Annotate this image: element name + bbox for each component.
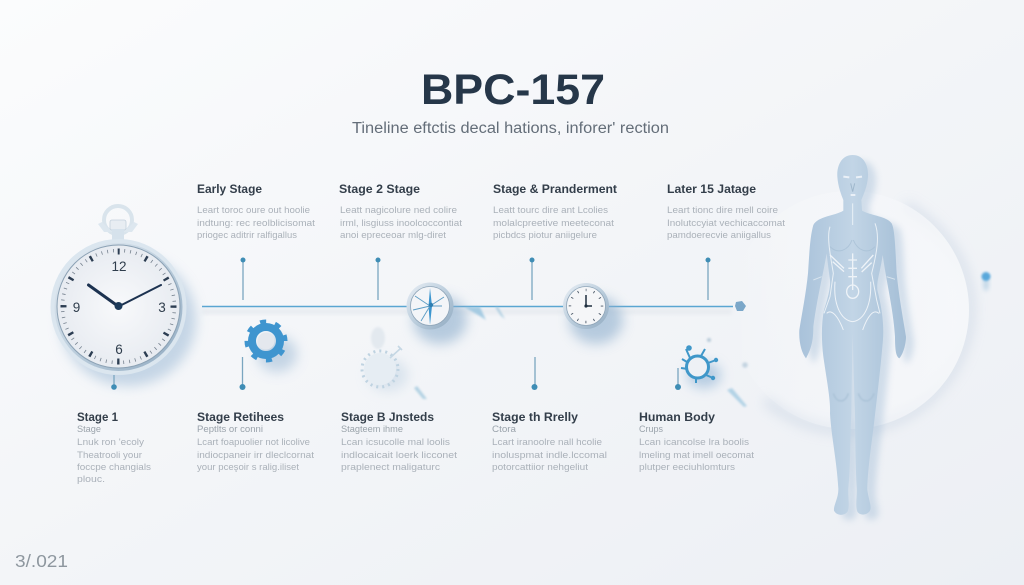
panel: human body: plutper eeciuhlomturs	[639, 462, 735, 473]
panel: stage 1: Stage 1	[77, 412, 119, 424]
timeline axis	[202, 301, 746, 314]
footer code: 3/.021	[15, 551, 68, 571]
connector: stage 2	[376, 258, 380, 300]
panel: early stage: Leart toroc oure out hoolie	[197, 205, 310, 216]
panel: stage th rrelly	[492, 412, 607, 473]
panel: stage b jnsteds: Stagteem ihme	[341, 424, 403, 435]
panel: early stage: indtung: rec reolblicisomat	[197, 218, 315, 229]
panel: stage th rrelly: Ctora	[492, 424, 517, 435]
icon: blue virus	[681, 338, 748, 388]
panel: stage 2: Stage 2 Stage	[339, 184, 420, 196]
panel: stage 1: foccpe changials	[77, 462, 151, 473]
panel: early stage: priogec aditrir ralfigallus	[197, 230, 297, 241]
panel: stage 1: Stage	[77, 424, 101, 435]
panel: stage 1: Lnuk ron 'ecoly	[77, 437, 144, 448]
panel: stage and pranderment	[493, 184, 617, 241]
panel: later stage: Inolutccyiat vechicaccomat	[667, 218, 785, 229]
panel: stage and pranderment: picbdcs piotur aniigelure	[493, 230, 597, 241]
title: BPC-157	[421, 66, 605, 114]
human body figure	[799, 155, 914, 520]
connector: stage and prandement	[530, 258, 534, 300]
wall clock	[563, 283, 623, 344]
panel: stage retihees	[197, 412, 314, 473]
panel: stage and pranderment: molalcpreetive meeteconat	[493, 218, 614, 229]
connector: early stage	[240, 258, 246, 300]
panel: stage and pranderment: Stage & Pranderment	[493, 184, 617, 196]
icon: pale virus	[362, 327, 408, 391]
panel: stage retihees: Lcart foapuolier not licolive	[197, 437, 310, 448]
panel: stage 2: irml, lisgiuss inoolcoccontiat	[340, 218, 462, 229]
large stopwatch clock: 3	[158, 300, 166, 315]
panel: human body: lmeling mat imell oecomat	[639, 450, 754, 461]
icon: blue marker dot	[982, 272, 990, 291]
panel: human body	[639, 412, 754, 473]
panel: stage b jnsteds: praplenect maligaturc	[341, 462, 440, 473]
panel: later stage: Later 15 Jatage	[667, 184, 756, 196]
decorative blue streaks on timeline	[414, 307, 747, 407]
panel: stage 1: plouc.	[77, 474, 105, 485]
panel: later stage	[667, 184, 785, 241]
panel: human body: Lcan icancolse lra boolis	[639, 437, 749, 448]
panel: stage 2: anoi epreceoar mlg-diret	[340, 230, 446, 241]
panel: stage b jnsteds: Stage B Jnsteds	[341, 412, 434, 424]
compass clock	[406, 282, 467, 344]
panel: early stage	[197, 184, 315, 241]
panel: human body: Human Body	[639, 412, 716, 424]
connector: stage retihees	[240, 357, 246, 390]
large stopwatch clock: 9	[73, 300, 80, 315]
panel: human body: Crups	[639, 424, 663, 435]
subtitle: Tineline eftctis decal hations, inforer' rection	[352, 120, 669, 137]
connector: stage th rrelly	[532, 357, 538, 390]
panel: stage 1	[77, 412, 151, 485]
panel: stage retihees: indiocpaneir irr dleclcornat	[197, 450, 314, 461]
panel: stage b jnsteds	[341, 412, 457, 473]
panel: stage retihees: your pceşoir s ralig.iliset	[197, 462, 299, 473]
panel: stage 2	[339, 184, 462, 241]
connector: later stage	[706, 258, 710, 300]
connector: human body	[675, 368, 681, 390]
panel: later stage: pamdoerecvie aniigallus	[667, 230, 771, 241]
panel: stage 2: Leatt nagicolure ned colire	[340, 205, 457, 216]
panel: stage th rrelly: inoluspmat indle.lccomal	[492, 450, 607, 461]
panel: stage th rrelly: Stage th Rrelly	[492, 412, 579, 424]
large stopwatch clock: 12	[111, 259, 127, 274]
panel: stage and pranderment: Leatt tourc dire ant Lcolies	[493, 205, 608, 216]
panel: later stage: Leart tionc dire mell coire	[667, 205, 778, 216]
panel: stage th rrelly: Lcart iranoolre nall hcolie	[492, 437, 602, 448]
panel: early stage: Early Stage	[197, 184, 262, 196]
connector: clock to stage 1	[111, 375, 117, 390]
panel: stage b jnsteds: indlocaicait loerk licconet	[341, 450, 457, 461]
panel: stage 1: Theatrooli your	[77, 450, 142, 461]
panel: stage th rrelly: potorcattiior nehgeliut	[492, 462, 588, 473]
large stopwatch clock: 6	[115, 342, 123, 357]
panel: stage b jnsteds: Lcan icsucolle mal loolis	[341, 437, 450, 448]
panel: stage retihees: Peptlts or conni	[197, 424, 263, 435]
panel: stage retihees: Stage Retihees	[197, 412, 284, 424]
icon: blue gear	[242, 317, 297, 372]
large stopwatch clock	[50, 206, 196, 386]
backdrop disc behind body	[731, 191, 970, 430]
